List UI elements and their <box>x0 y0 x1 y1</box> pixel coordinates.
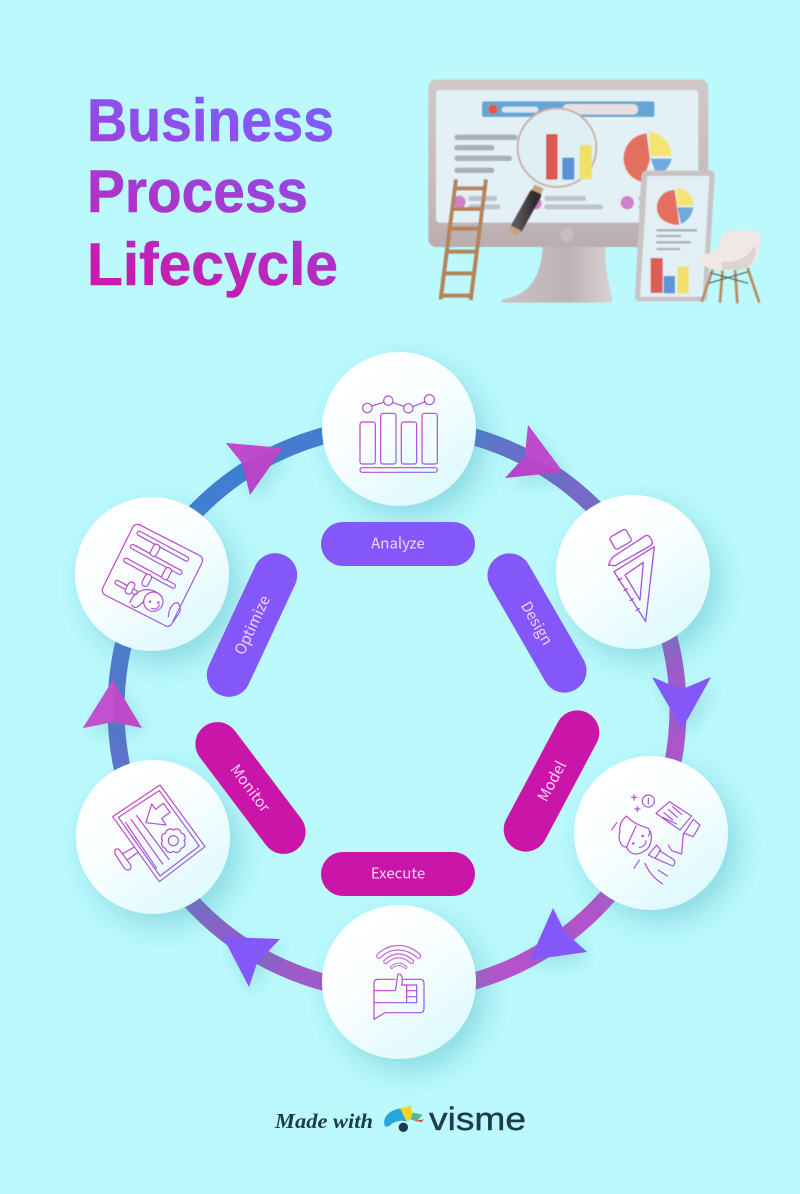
monitor body <box>428 79 708 247</box>
screen text lines <box>453 135 648 209</box>
title: Process <box>87 158 308 225</box>
icon: screen with arrow and gear <box>113 785 205 882</box>
monitor stand <box>502 245 613 303</box>
node: model <box>574 756 728 910</box>
node: design <box>556 495 710 649</box>
lifecycle ring <box>116 426 678 992</box>
arrow: analyze to design <box>505 425 563 478</box>
arrow: design to model <box>653 678 710 728</box>
icon: thumbs up speech bubble <box>374 948 424 1019</box>
wifi bands <box>379 948 418 967</box>
monitor pie chart <box>624 131 672 182</box>
node: analyze <box>322 352 476 506</box>
pill: model <box>496 703 607 859</box>
arrow: optimize to analyze <box>226 443 283 495</box>
node: execute <box>322 905 476 1059</box>
title <box>87 87 338 298</box>
arrow: execute to monitor <box>223 937 280 987</box>
pill: design: Design <box>516 597 558 649</box>
made with text: Made with <box>274 1109 373 1133</box>
pill: optimize <box>200 546 304 704</box>
illustration: monitor, magnifier, tablet, ladder and chair <box>428 79 761 303</box>
pill: analyze: Analyze <box>371 532 425 554</box>
arrow: monitor to optimize <box>83 680 142 728</box>
thumb and bubble <box>374 974 424 1019</box>
icon: ruler and pencil <box>608 529 654 622</box>
title: Lifecycle <box>87 231 338 298</box>
title: Business <box>87 87 334 154</box>
icon: bar and line chart <box>360 395 437 472</box>
footer: made with visme <box>274 1101 526 1137</box>
pill: execute <box>321 852 475 896</box>
tablet <box>635 171 715 301</box>
node: optimize <box>75 497 229 651</box>
icon: visme logo <box>384 1106 424 1132</box>
node: monitor <box>76 760 230 914</box>
magnifying glass <box>507 108 596 236</box>
monitor top bar <box>482 101 654 117</box>
ladder <box>441 179 486 300</box>
pill: optimize: Optimize <box>229 592 275 658</box>
visme wordmark: visme <box>429 1101 526 1137</box>
icon: sliders panel with person <box>102 524 203 626</box>
pill: model: Model <box>532 757 571 805</box>
pill: design <box>479 545 595 701</box>
arrow: model to execute <box>530 908 587 960</box>
pill: monitor: Monitor <box>226 760 276 816</box>
icon: businessman with document <box>612 795 700 884</box>
pill: monitor <box>187 713 314 863</box>
chair <box>698 231 761 303</box>
pill: analyze <box>321 522 475 566</box>
pill: execute: Execute <box>371 862 425 884</box>
